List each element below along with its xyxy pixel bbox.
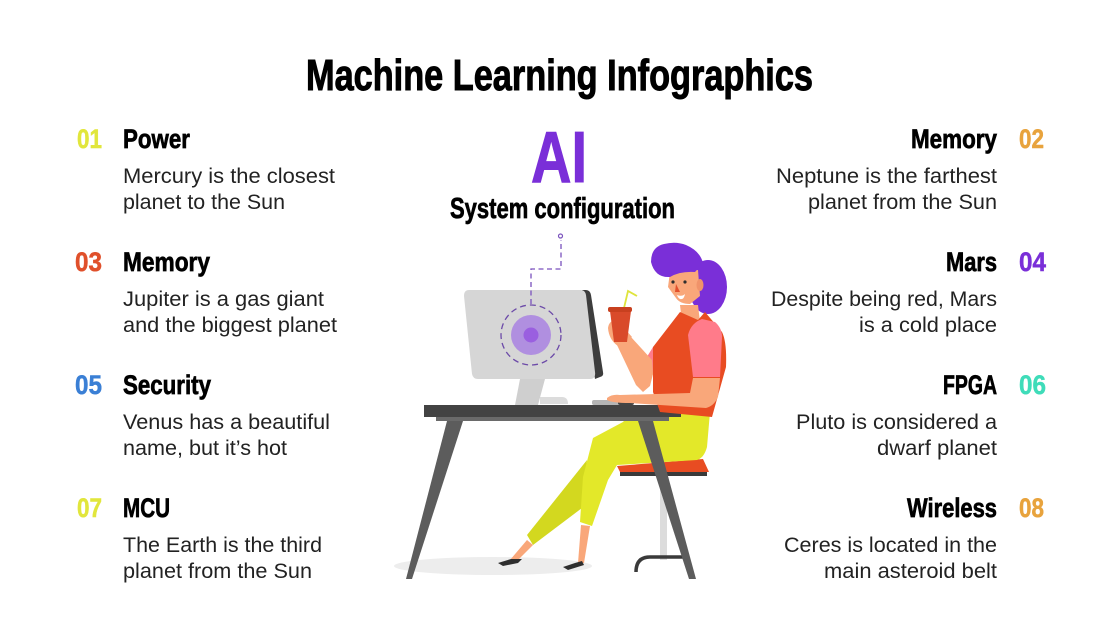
item 06: FPGA [796, 370, 1046, 460]
item 04: mars: Despite being red, Mars [771, 288, 997, 311]
icon: chair [617, 459, 709, 572]
item 08: wireless: Wireless [907, 493, 997, 523]
item 03: memory: and the biggest planet [123, 314, 337, 337]
item 03: memory: 03 [75, 247, 102, 277]
subheading: system configuration: System configuration [450, 193, 675, 225]
item 07: MCU [77, 493, 322, 583]
item 08: wireless: Ceres is located in the [784, 534, 997, 557]
item 04: mars: 04 [1019, 247, 1046, 277]
item 07: MCU: 07 [77, 493, 102, 523]
heading: AI: AI [531, 118, 587, 198]
item 06: FPGA: dwarf planet [877, 437, 997, 460]
item 01: power: Power [123, 124, 190, 154]
item 01: power [77, 124, 335, 214]
item 01: power: Mercury is the closest [123, 165, 335, 188]
item 06: FPGA: FPGA [943, 370, 997, 400]
item 07: MCU: MCU [123, 493, 170, 523]
item 04: mars: Mars [946, 247, 997, 277]
torso [645, 305, 726, 417]
front leg [563, 412, 710, 570]
floor shadow [394, 557, 592, 575]
item 05: security: Security [123, 370, 211, 400]
item 04: mars [771, 247, 1046, 337]
item 02: memory [776, 124, 1044, 214]
connector: dashed line from monitor to heading [531, 234, 562, 304]
title: Machine Learning Infographics [306, 51, 813, 100]
item 02: memory: 02 [1019, 124, 1044, 154]
item 05: security [75, 370, 330, 460]
head [651, 243, 704, 304]
item 06: FPGA: Pluto is considered a [796, 411, 997, 434]
arm on keyboard [607, 378, 720, 408]
item 03: memory [75, 247, 337, 337]
item 02: memory: planet from the Sun [808, 191, 997, 214]
item 08: wireless [784, 493, 1044, 583]
item 07: MCU: planet from the Sun [123, 560, 312, 583]
back leg [498, 460, 587, 566]
item 05: security: Venus has a beautiful [123, 411, 330, 434]
item 06: FPGA: 06 [1019, 370, 1046, 400]
illustration: person at desk with computer [394, 234, 727, 579]
icon: drink with straw [608, 291, 637, 342]
keyboard [592, 400, 634, 405]
item 08: wireless: 08 [1019, 493, 1044, 523]
item 02: memory: Neptune is the farthest [776, 165, 997, 188]
item 01: power: planet to the Sun [123, 191, 285, 214]
item 01: power: 01 [77, 124, 102, 154]
hair back [689, 260, 727, 314]
icon: monitor [464, 290, 603, 405]
item 08: wireless: main asteroid belt [824, 560, 997, 583]
item 05: security: name, but it’s hot [123, 437, 287, 460]
item 07: MCU: The Earth is the third [123, 534, 322, 557]
item 03: memory: Memory [123, 247, 210, 277]
item 03: memory: Jupiter is a gas giant [123, 288, 324, 311]
item 02: memory: Memory [911, 124, 997, 154]
item 05: security: 05 [75, 370, 102, 400]
item 04: mars: is a cold place [859, 314, 997, 337]
arm holding cup [608, 320, 653, 392]
desk [406, 405, 696, 579]
